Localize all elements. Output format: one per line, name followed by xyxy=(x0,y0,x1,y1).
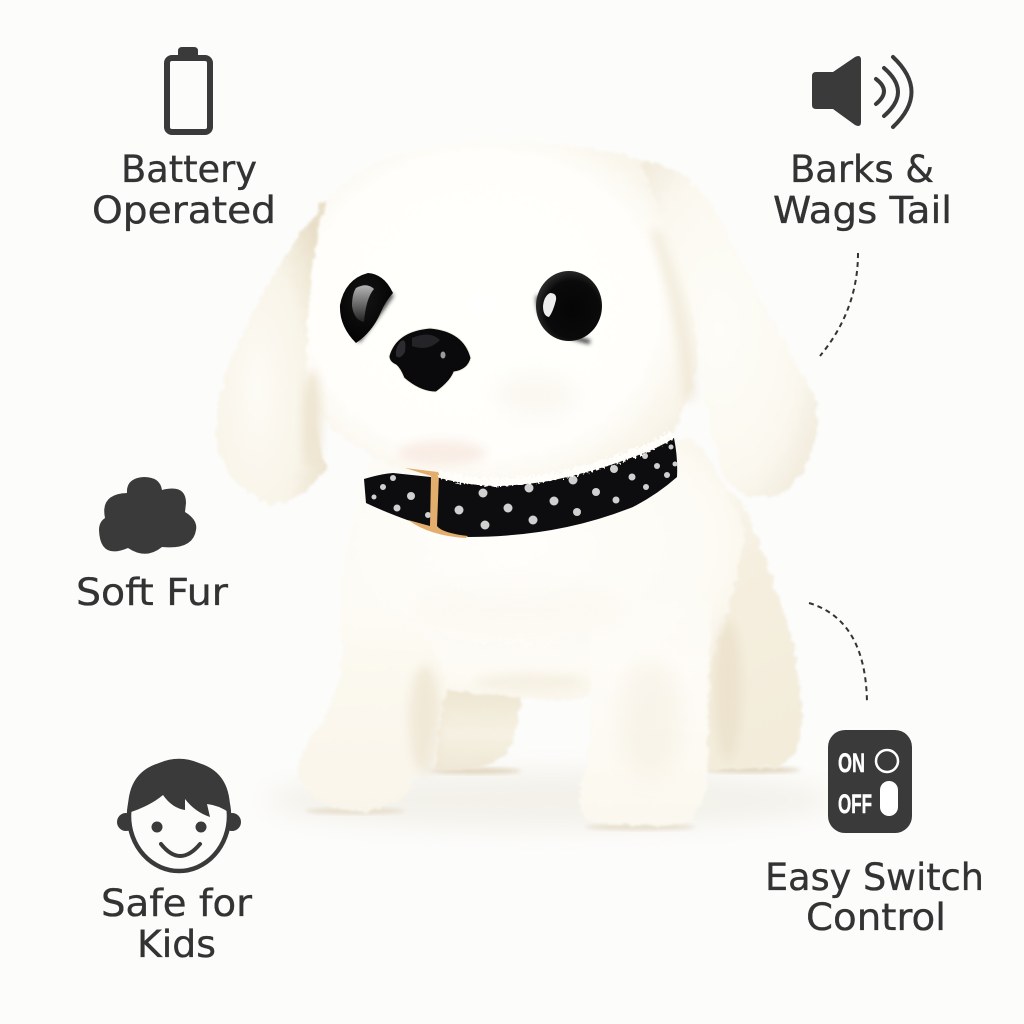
heading: easy switch control xyxy=(765,856,984,939)
heading: easy switch control: Easy Switch xyxy=(765,856,984,899)
arrow: dashed line lower xyxy=(809,603,867,703)
icon: speaker xyxy=(812,56,912,127)
fur body parts xyxy=(216,141,817,826)
right eye xyxy=(536,271,602,342)
icon: on/off switch: OFF xyxy=(838,789,872,819)
fur shading xyxy=(303,230,742,780)
heading: barks and wags tail: Wags Tail xyxy=(773,189,952,232)
heading: safe for kids xyxy=(101,882,253,966)
fur overlapping collar xyxy=(440,434,672,482)
heading: soft fur: Soft Fur xyxy=(76,571,229,614)
icon: battery xyxy=(167,47,210,132)
plush puppy xyxy=(216,141,817,826)
ground shadow xyxy=(265,767,835,830)
icon: cloud xyxy=(99,477,196,554)
heading: barks and wags tail xyxy=(773,148,952,232)
heading: battery operated: Battery xyxy=(121,148,257,191)
heading: safe for kids: Safe for xyxy=(101,882,253,925)
heading: barks and wags tail: Barks & xyxy=(790,148,934,191)
arrow: dashed line upper xyxy=(820,253,858,356)
nose xyxy=(389,328,471,392)
heading: battery operated xyxy=(92,148,276,232)
collar xyxy=(364,438,678,538)
buckle xyxy=(405,468,468,538)
icon: on/off switch: ON xyxy=(838,748,865,778)
heading: battery operated: Operated xyxy=(92,189,276,232)
icon: child face xyxy=(117,760,241,871)
muzzle patch xyxy=(398,440,486,466)
icon: on/off switch xyxy=(828,730,912,833)
left eye xyxy=(340,273,393,343)
heading: safe for kids: Kids xyxy=(137,923,216,966)
heading: easy switch control: Control xyxy=(806,896,946,939)
